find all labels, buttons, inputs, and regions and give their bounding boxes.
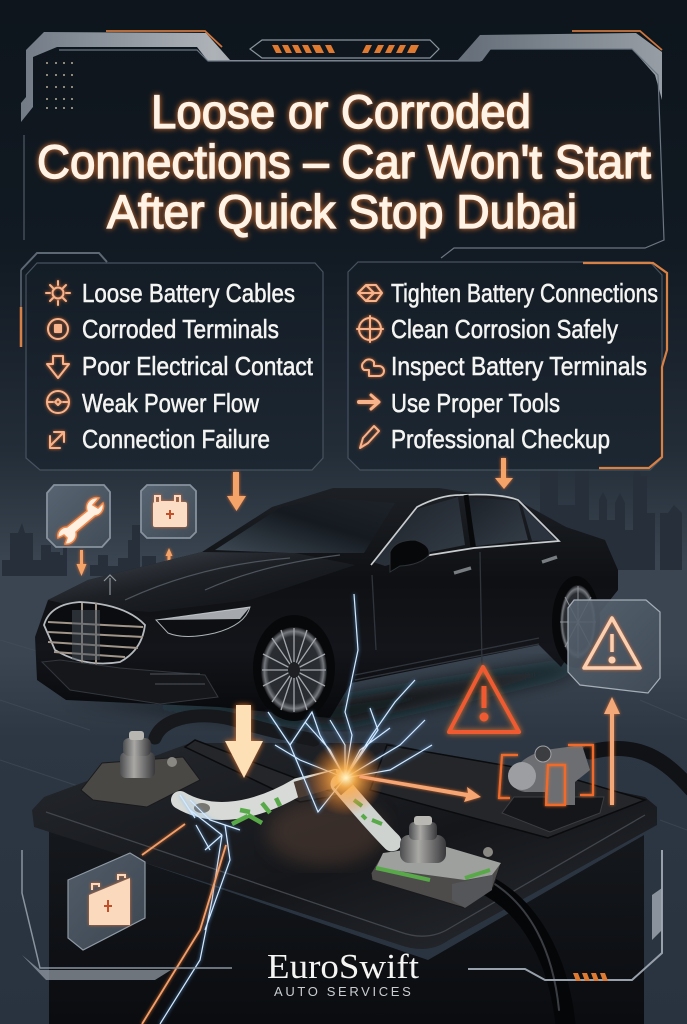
causes list text: Poor Electrical Contact <box>82 351 314 381</box>
car body <box>35 488 618 718</box>
big orange down arrow <box>225 705 263 778</box>
title: Connections – Car Won't Start <box>37 135 651 188</box>
logo: EuroSwift: AUTO SERVICES <box>274 984 414 999</box>
arrow: panel to car right <box>495 458 513 489</box>
battery <box>32 740 657 1024</box>
battery top surface <box>32 743 657 949</box>
fixes list text: Use Proper Tools <box>391 388 560 418</box>
title: After Quick Stop Dubai <box>107 185 577 238</box>
rear plate <box>185 740 645 838</box>
car <box>35 488 618 725</box>
causes icons <box>46 281 70 448</box>
dot grid <box>46 62 73 109</box>
chrome window trim <box>371 495 559 565</box>
logo: EuroSwift: EuroSwift <box>267 947 419 986</box>
door lines and handles <box>355 552 539 680</box>
side windows <box>373 497 465 566</box>
bottom frame right <box>468 850 662 981</box>
causes list text: Corroded Terminals <box>82 314 279 344</box>
grille <box>44 602 145 666</box>
title: Loose or Corroded <box>151 85 531 138</box>
icon: battery card <box>141 485 196 538</box>
terminal: front <box>371 816 501 908</box>
orange leader lines <box>142 824 226 1024</box>
windshield <box>215 498 395 553</box>
corroded cable left <box>180 778 338 824</box>
mirror <box>390 540 429 572</box>
city skyline <box>2 462 682 576</box>
warning card <box>568 600 660 693</box>
header frame <box>21 31 664 258</box>
small arrows under cards <box>76 548 172 576</box>
cables <box>155 716 687 1024</box>
arrow: spark to terminal <box>359 775 481 802</box>
rear wheel <box>552 576 600 668</box>
fixes list text: Clean Corrosion Safely <box>391 314 618 344</box>
hood star <box>104 575 116 595</box>
terminal: left <box>81 731 200 807</box>
fixes icons <box>357 285 384 448</box>
spark burst <box>308 740 384 816</box>
battery body <box>49 830 644 1024</box>
headlight <box>156 607 250 636</box>
causes list text: Weak Power Flow <box>82 388 259 418</box>
lower bumper <box>42 660 218 704</box>
terminal: right with orange brackets <box>499 745 604 832</box>
battery card <box>68 853 145 950</box>
arrow: panel to car left <box>227 472 246 511</box>
fixes list text: Inspect Battery Terminals <box>391 351 647 381</box>
causes list text <box>82 278 314 454</box>
panel: fixes <box>348 262 667 470</box>
causes list text: Connection Failure <box>82 424 270 454</box>
warning triangle <box>449 667 519 732</box>
corroded cable right <box>340 782 392 842</box>
front wheel <box>253 615 335 721</box>
arrow: up to warning card <box>604 697 620 805</box>
fixes list text: Professional Checkup <box>391 424 610 454</box>
car shadow <box>60 660 590 725</box>
bottom frame left <box>22 850 232 980</box>
title <box>37 85 651 238</box>
car hood <box>48 552 355 612</box>
header centre tab <box>250 40 439 58</box>
panel: causes <box>21 253 323 470</box>
fixes list text <box>391 278 658 454</box>
icon: wrench card <box>47 485 110 547</box>
lightning <box>160 594 432 1024</box>
ground floor lines <box>0 640 687 830</box>
causes list text: Loose Battery Cables <box>82 278 295 308</box>
